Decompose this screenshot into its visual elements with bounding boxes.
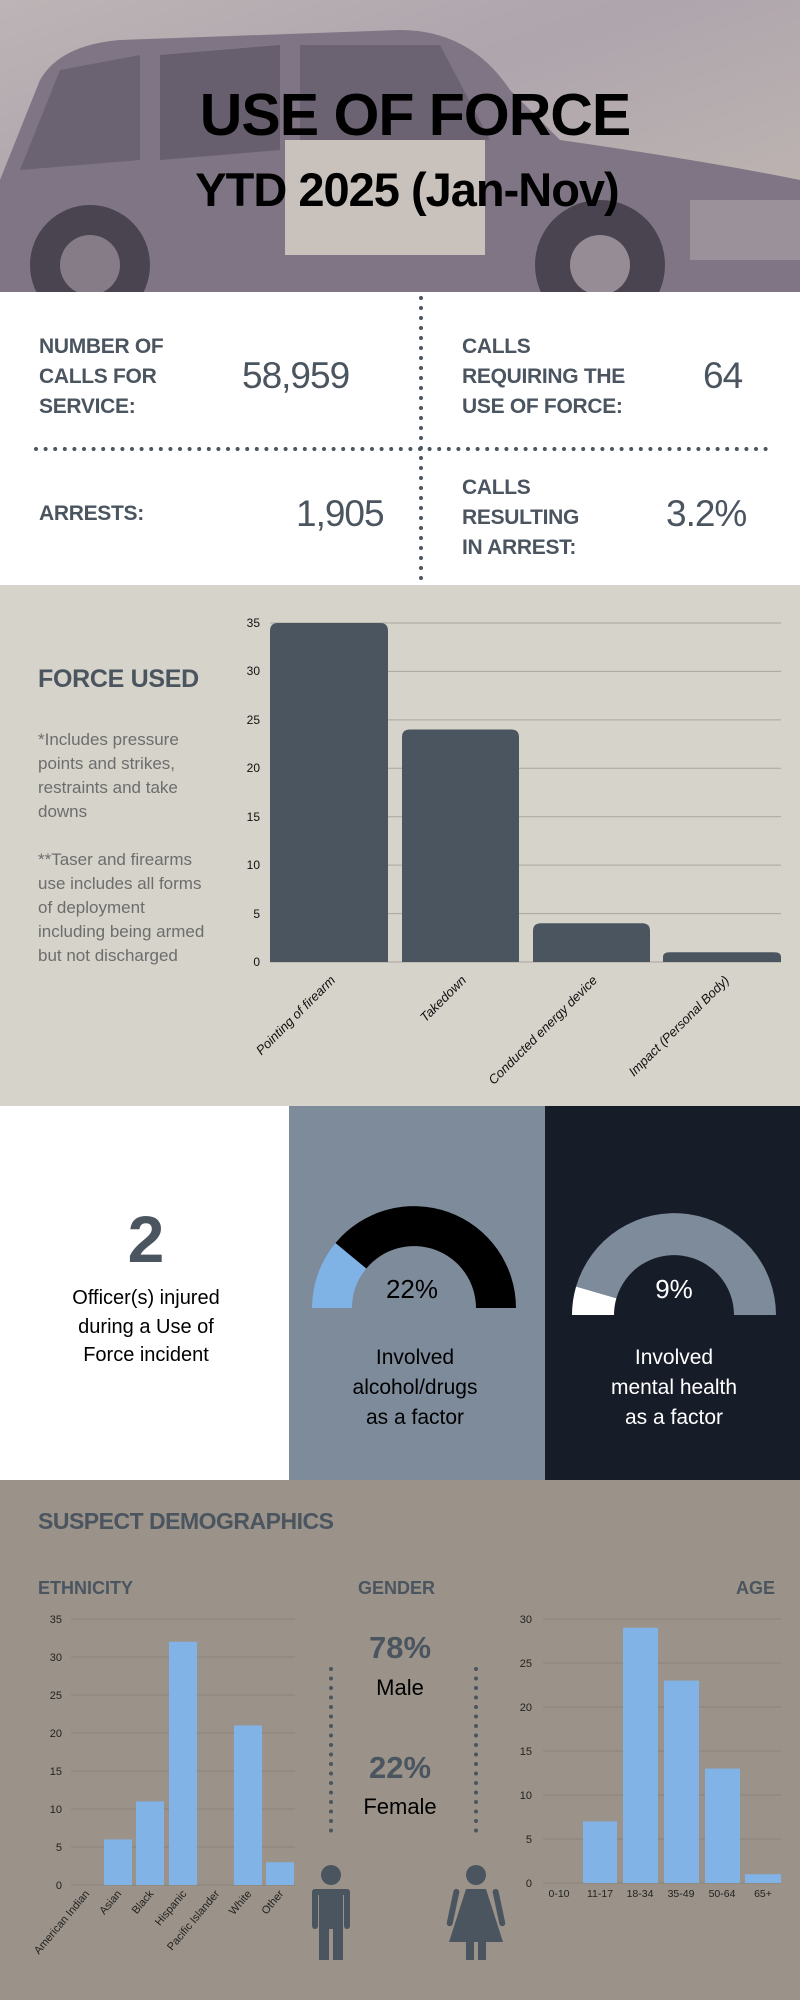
subtitle: YTD 2025 (Jan-Nov) xyxy=(195,163,619,216)
stat: calls requiring force: 64 xyxy=(703,355,742,396)
heading: suspect demographics: SUSPECT DEMOGRAPHICS xyxy=(38,1508,333,1534)
bar chart: age: 25 xyxy=(520,1658,532,1670)
stat: calls for service: NUMBER OF xyxy=(39,335,163,358)
heading: force used: FORCE USED xyxy=(38,665,199,693)
stat: calls resulting in arrest: CALLS xyxy=(462,476,530,499)
bar chart: ethnicity xyxy=(32,1614,295,1957)
bar chart: age: 0 xyxy=(526,1878,532,1890)
bar chart: force used: 5 xyxy=(253,907,260,921)
bar chart: force used: 10 xyxy=(247,858,260,872)
stat: officers injured: Officer(s) injured xyxy=(72,1287,220,1309)
panel: injuries and factors xyxy=(0,1106,800,1480)
gender stats: 22% xyxy=(369,1750,431,1785)
title: USE OF FORCE xyxy=(200,82,630,148)
car body xyxy=(0,30,800,292)
heading: ethnicity: ETHNICITY xyxy=(38,1578,133,1598)
bar chart: ethnicity: Other xyxy=(259,1888,287,1917)
bar chart: age: 5 xyxy=(526,1834,532,1846)
bar chart: age: 65+ xyxy=(754,1888,772,1900)
header: police car photo banner xyxy=(0,0,800,292)
bar chart: force used: Takedown xyxy=(417,973,469,1025)
wheels xyxy=(30,205,150,325)
stat: calls for service: 58,959 xyxy=(242,355,349,396)
bar chart: force used xyxy=(247,616,781,1087)
stat: arrests: ARRESTS: xyxy=(39,502,144,525)
bar chart: ethnicity: 0 xyxy=(56,1880,62,1892)
bar chart: force used: 20 xyxy=(247,761,260,775)
text block: notes: *Includes pressure points and strikes, restraints and take downs xyxy=(38,730,179,821)
gender stats: Female xyxy=(363,1794,437,1819)
bar chart: force used: 15 xyxy=(247,810,260,824)
bar chart: force used: Conducted energy device xyxy=(485,973,600,1087)
stat: calls for service: SERVICE: xyxy=(39,395,135,418)
icons: gender figures xyxy=(312,1667,506,1960)
panel: mental health gauge: Involved xyxy=(635,1346,713,1369)
stat: calls requiring force: USE OF FORCE: xyxy=(462,395,623,418)
chart: gauges xyxy=(312,1206,776,1315)
bar chart: ethnicity: 20 xyxy=(50,1728,62,1740)
stat: calls resulting in arrest: IN ARREST: xyxy=(462,536,576,559)
icon: woman xyxy=(446,1865,506,1964)
stat: officers injured: 2 xyxy=(128,1202,164,1276)
stat: calls resulting in arrest: 3.2% xyxy=(666,493,746,534)
bar chart: ethnicity: 5 xyxy=(56,1842,62,1854)
panel: mental health gauge xyxy=(545,1106,800,1480)
stat: officers injured: Force incident xyxy=(83,1344,209,1366)
bar chart: force used: Impact (Personal Body) xyxy=(625,973,732,1079)
bar chart: age: 0-10 xyxy=(548,1888,570,1900)
chart: gauges: 9% xyxy=(655,1274,693,1304)
stat: arrests: 1,905 xyxy=(296,493,384,534)
bar chart: force used: 0 xyxy=(253,955,260,969)
panel: mental health gauge: as a factor xyxy=(625,1406,723,1429)
stat: calls requiring force: REQUIRING THE xyxy=(462,365,625,388)
bar chart: age xyxy=(520,1614,781,1900)
stat: calls for service: CALLS FOR xyxy=(39,365,156,388)
panel: suspect demographics xyxy=(0,1480,800,2000)
white door panel xyxy=(285,140,485,255)
bar chart: force used: 30 xyxy=(247,664,260,678)
bar chart: age: 10 xyxy=(520,1790,532,1802)
stat: arrests xyxy=(39,493,384,534)
bar chart: ethnicity: 10 xyxy=(50,1804,62,1816)
stat: calls requiring force: CALLS xyxy=(462,335,530,358)
bar chart: age: 18-34 xyxy=(627,1888,654,1900)
panel: alcohol/drugs gauge: as a factor xyxy=(366,1406,464,1429)
bar chart: ethnicity: 35 xyxy=(50,1614,62,1626)
bar chart: ethnicity: Asian xyxy=(97,1888,124,1917)
gender stats xyxy=(363,1630,437,1819)
text block: notes xyxy=(38,730,204,965)
panel: alcohol/drugs gauge xyxy=(289,1106,545,1480)
bar chart: age: 50-64 xyxy=(709,1888,736,1900)
bar chart: ethnicity: Black xyxy=(130,1888,157,1917)
heading: gender: GENDER xyxy=(358,1578,435,1598)
gender stats: 78% xyxy=(369,1630,431,1665)
bar chart: age: 15 xyxy=(520,1746,532,1758)
stat: calls for service xyxy=(39,335,349,418)
chart: gauges: 22% xyxy=(386,1274,438,1304)
bar chart: age: 20 xyxy=(520,1702,532,1714)
bar chart: age: 35-49 xyxy=(668,1888,695,1900)
bar chart: age: 30 xyxy=(520,1614,532,1626)
bar chart: force used: 25 xyxy=(247,713,260,727)
bar chart: age: 11-17 xyxy=(587,1888,613,1900)
stat: officers injured xyxy=(72,1202,220,1366)
bar chart: ethnicity: 15 xyxy=(50,1766,62,1778)
stat: calls resulting in arrest: RESULTING xyxy=(462,506,579,529)
stat: officers injured: during a Use of xyxy=(78,1316,214,1338)
gender stats: Male xyxy=(376,1675,424,1700)
icon: man xyxy=(312,1865,350,1964)
stat: calls requiring force xyxy=(462,335,742,418)
panel: mental health gauge: mental health xyxy=(611,1376,737,1399)
bar chart: ethnicity: 25 xyxy=(50,1690,62,1702)
bar chart: force used: Pointing of firearm xyxy=(253,972,338,1058)
heading: age: AGE xyxy=(736,1578,775,1598)
stat: calls resulting in arrest xyxy=(462,476,746,559)
panel: force used xyxy=(0,585,800,1106)
text block: notes: **Taser and firearms use includes all forms of deployment including being armed but not discharged xyxy=(38,850,204,965)
bar chart: ethnicity: Pacific Islander xyxy=(165,1888,223,1953)
bar chart: ethnicity: Hispanic xyxy=(153,1888,190,1928)
panel: key stats xyxy=(0,292,800,585)
bar chart: ethnicity: American Indian xyxy=(32,1888,92,1957)
bar chart: ethnicity: 30 xyxy=(50,1652,62,1664)
panel: alcohol/drugs gauge: Involved xyxy=(376,1346,454,1369)
bar chart: ethnicity: White xyxy=(227,1888,254,1917)
panel: alcohol/drugs gauge: alcohol/drugs xyxy=(353,1376,477,1399)
bar chart: force used: 35 xyxy=(247,616,260,630)
